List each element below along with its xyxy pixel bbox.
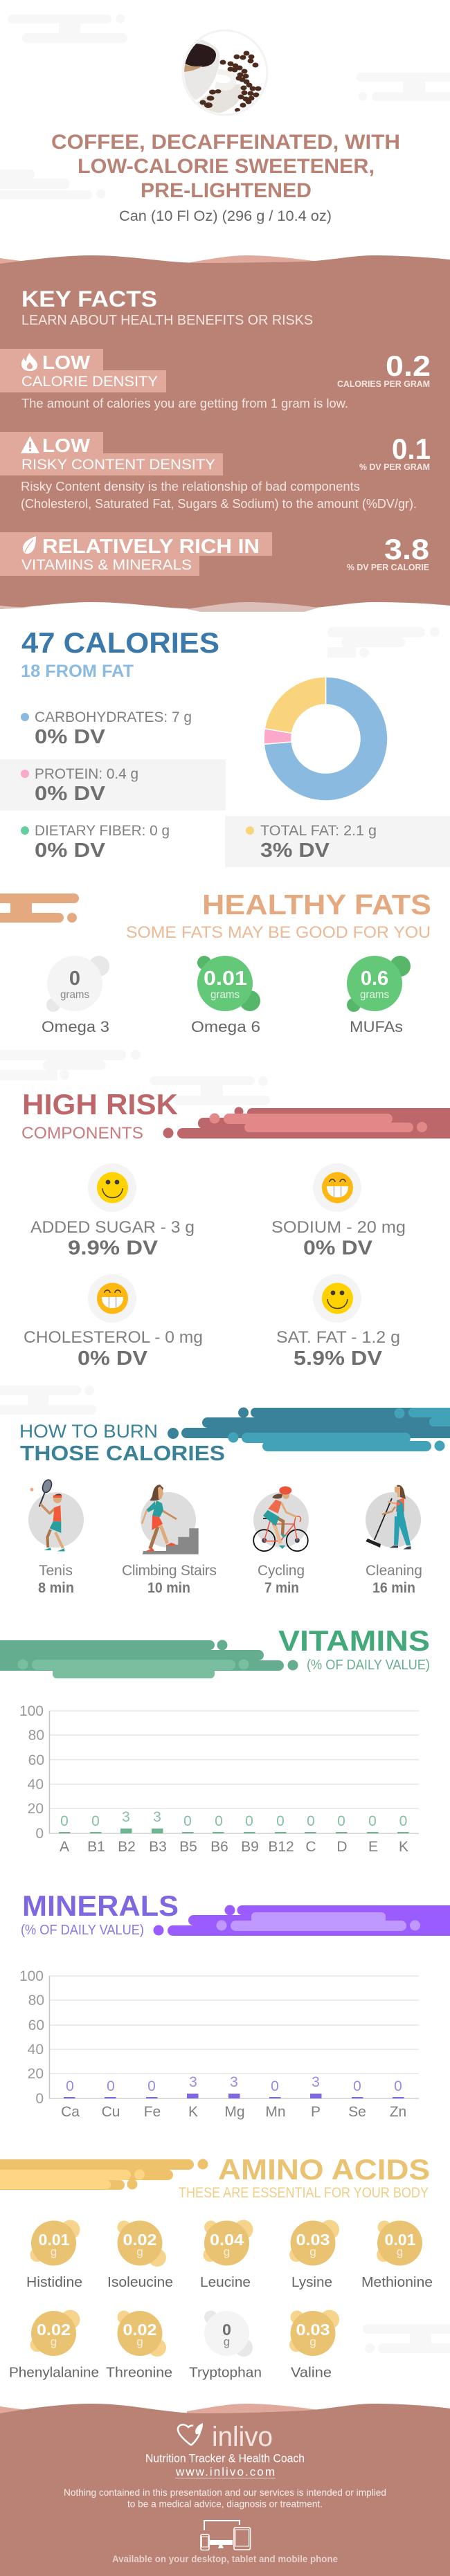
amino: tryptophan: 0 — [222, 2321, 231, 2339]
bar chart: vitamins: 80 — [28, 1727, 44, 1743]
decorative banner: minerals — [154, 1905, 450, 1936]
metric: mufas: 0.6 — [361, 968, 388, 990]
fact: vitamins and minerals: % DV PER CALORIE — [347, 562, 429, 572]
fact: vitamins and minerals — [0, 532, 429, 576]
activity: tennis: Tenis — [39, 1563, 73, 1579]
macro: carbohydrates: 0% DV — [35, 726, 106, 748]
amino: histidine: Histidine — [26, 2275, 82, 2290]
amino: lysine: Lysine — [291, 2275, 332, 2290]
amino: phenylalanine: g — [51, 2335, 57, 2348]
bar chart: minerals: Se — [348, 2104, 366, 2120]
bar chart: vitamins: 0 — [337, 1813, 345, 1829]
macro: carbohydrates — [21, 709, 192, 748]
fact: vitamins and minerals: RELATIVELY RICH IN — [42, 536, 260, 558]
amino: phenylalanine: Phenylalanine — [9, 2366, 99, 2381]
fact: calorie density: LOW — [42, 352, 91, 373]
macro: carbohydrates: CARBOHYDRATES: 7 g — [35, 709, 192, 725]
amino: histidine — [26, 2220, 82, 2290]
bar chart: minerals: 40 — [28, 2042, 44, 2058]
fact: risky content density: Risky Content density is the relationship of bad components — [21, 480, 360, 493]
amino: lysine — [289, 2220, 339, 2290]
bar chart: minerals: 0 — [147, 2078, 156, 2094]
bar chart: vitamins: 3 — [153, 1809, 161, 1825]
item: sodium: 0% DV — [303, 1237, 373, 1260]
icon: devices — [201, 2521, 251, 2550]
availability note: Available on your desktop, tablet and mobile phone — [112, 2553, 338, 2564]
bar chart: vitamins: K — [399, 1839, 408, 1855]
amino: threonine: g — [136, 2335, 143, 2348]
bar chart: minerals: 0 — [107, 2078, 115, 2094]
bar chart: vitamins: 0 — [183, 1813, 192, 1829]
heading: high risk: HIGH RISK — [22, 1088, 178, 1121]
macro: dietary fiber: DIETARY FIBER: 0 g — [35, 823, 170, 839]
fact: vitamins and minerals: VITAMINS & MINERALS — [21, 557, 192, 573]
metric: omega 6: Omega 6 — [191, 1018, 260, 1035]
bar chart: minerals: 0 — [353, 2078, 361, 2094]
heading: those calories: THOSE CALORIES — [20, 1441, 225, 1465]
amino: histidine: g — [51, 2245, 57, 2258]
subheading: components: COMPONENTS — [21, 1124, 143, 1143]
title: COFFEE, DECAFFEINATED, WITH — [51, 131, 400, 154]
bar chart: minerals: K — [188, 2104, 198, 2120]
item: sodium — [271, 1163, 406, 1260]
heading: amino acids: AMINO ACIDS — [218, 2153, 430, 2186]
activity: tennis: 8 min — [38, 1580, 74, 1596]
bar chart: minerals: 20 — [28, 2066, 44, 2082]
bar chart: minerals: 60 — [28, 2017, 44, 2033]
amino: isoleucine: g — [136, 2245, 143, 2258]
bar chart: minerals: 3 — [230, 2074, 238, 2090]
panel: healthy fats — [0, 889, 431, 1035]
bar chart: minerals: Cu — [102, 2104, 120, 2120]
macro: total fat: TOTAL FAT: 2.1 g — [260, 823, 377, 839]
bar chart: vitamins: 0 — [35, 1826, 44, 1842]
amino: tryptophan: Tryptophan — [189, 2366, 262, 2381]
amino: methionine: Methionine — [361, 2275, 433, 2290]
bar chart: vitamins: 0 — [91, 1813, 100, 1829]
heading: how to burn: HOW TO BURN — [19, 1421, 158, 1442]
panel: amino acids — [0, 2153, 433, 2381]
macro: protein: 0% DV — [35, 783, 106, 805]
bar chart: minerals: Ca — [61, 2104, 80, 2120]
panel: vitamins — [0, 1624, 430, 1855]
disclaimer — [64, 2487, 386, 2510]
bar chart: minerals: 80 — [28, 1993, 44, 2008]
amino: isoleucine — [107, 2220, 173, 2290]
activity: cleaning — [366, 1485, 422, 1596]
amino: methionine: g — [397, 2245, 403, 2258]
logo wordmark: inlivo — [212, 2422, 273, 2452]
amino: phenylalanine — [9, 2310, 99, 2381]
fact: calorie density: The amount of calories you are getting from 1 gram is low. — [21, 397, 348, 410]
fact: risky content density: % DV PER GRAM — [359, 462, 430, 472]
donut chart — [264, 677, 388, 801]
item: saturated fat: SAT. FAT - 1.2 g — [276, 1328, 400, 1347]
item: saturated fat — [276, 1274, 400, 1370]
activity: cycling: 7 min — [264, 1580, 299, 1596]
bar chart: minerals: 100 — [19, 1968, 44, 1984]
bar chart: vitamins: 20 — [28, 1801, 44, 1817]
food photo: coffee cup and beans — [181, 30, 267, 116]
panel: high risk — [21, 1088, 450, 1370]
bar chart: vitamins: 0 — [368, 1813, 377, 1829]
bar chart: vitamins: 0 — [60, 1813, 69, 1829]
panel: key facts — [0, 255, 450, 612]
metric: omega 3 — [42, 956, 109, 1035]
item: added sugar: ADDED SUGAR - 3 g — [30, 1218, 195, 1237]
amino: methionine: 0.01 — [385, 2231, 416, 2249]
item: cholesterol — [24, 1274, 203, 1370]
subheading: LEARN ABOUT HEALTH BENEFITS OR RISKS — [21, 313, 313, 328]
activity: cleaning: 16 min — [372, 1580, 415, 1596]
fact: risky content density: RISKY CONTENT DENSITY — [21, 457, 215, 473]
fact: risky content density: LOW — [42, 435, 91, 456]
bar chart: vitamins: E — [368, 1839, 378, 1855]
bar chart: vitamins: 60 — [28, 1752, 44, 1768]
macro: protein: PROTEIN: 0.4 g — [35, 766, 138, 782]
bar chart: minerals: 3 — [189, 2074, 197, 2090]
bar chart: minerals: Mg — [224, 2104, 245, 2120]
bar chart: vitamins: 0 — [276, 1813, 285, 1829]
item: added sugar — [30, 1163, 195, 1260]
decorative banner: healthy fats — [0, 894, 79, 923]
heading: healthy fats: HEALTHY FATS — [202, 889, 431, 920]
amino: lysine: g — [309, 2245, 316, 2258]
tagline: Nutrition Tracker & Health Coach — [145, 2451, 305, 2465]
subheading: from fat: 18 FROM FAT — [21, 662, 134, 681]
activity: tennis — [28, 1478, 84, 1596]
item: cholesterol: 0% DV — [78, 1348, 148, 1370]
disclaimer: to be a medical advice, diagnosis or treatment. — [127, 2498, 323, 2510]
amino: valine: g — [309, 2335, 316, 2348]
fact: calorie density: CALORIES PER GRAM — [337, 379, 430, 389]
item: added sugar: 9.9% DV — [68, 1237, 159, 1260]
disclaimer: Nothing contained in this presentation and our services is intended or implied — [64, 2487, 386, 2498]
amino: tryptophan — [189, 2310, 262, 2381]
subheading: healthy fats: SOME FATS MAY BE GOOD FOR YOU — [126, 923, 431, 942]
amino: lysine: 0.03 — [296, 2231, 330, 2249]
bar chart: vitamins: B3 — [149, 1839, 167, 1855]
amino: valine: 0.03 — [296, 2321, 330, 2339]
macro: dietary fiber — [21, 823, 170, 862]
bar chart: minerals: 0 — [66, 2078, 74, 2094]
activity: cycling — [253, 1487, 309, 1596]
metric: mufas: MUFAs — [350, 1018, 403, 1035]
amino: leucine: g — [224, 2245, 230, 2258]
item: saturated fat: 5.9% DV — [294, 1348, 383, 1370]
title: PRE-LIGHTENED — [141, 179, 312, 202]
bar chart: vitamins: 0 — [399, 1813, 407, 1829]
bar chart: vitamins: 40 — [28, 1777, 44, 1793]
amino: leucine: 0.04 — [210, 2231, 244, 2249]
amino: leucine — [200, 2220, 253, 2290]
fact: calorie density: CALORIE DENSITY — [21, 374, 158, 390]
website link: www.inlivo.com — [175, 2465, 275, 2478]
serving size: Can (10 Fl Oz) (296 g / 10.4 oz) — [119, 208, 332, 224]
metric: omega 3: 0 — [69, 968, 80, 990]
decorative banner: burn — [168, 1408, 450, 1451]
amino: leucine: Leucine — [200, 2275, 251, 2290]
panel: how to burn calories — [19, 1408, 450, 1596]
bar chart: vitamins: B5 — [179, 1839, 197, 1855]
bar chart: vitamins: 0 — [215, 1813, 223, 1829]
bar chart: vitamins — [19, 1703, 419, 1855]
activity: climbing stairs: Climbing Stairs — [122, 1563, 217, 1579]
fact: vitamins and minerals: 3.8 — [384, 533, 429, 565]
macro: dietary fiber: 0% DV — [35, 840, 106, 862]
bar chart: minerals: 3 — [312, 2074, 320, 2090]
amino: threonine — [106, 2310, 172, 2381]
macro: total fat — [225, 816, 450, 867]
bar chart: vitamins: D — [336, 1839, 348, 1855]
panel: footer — [0, 2404, 450, 2576]
bar chart: vitamins: A — [60, 1839, 69, 1855]
amino: valine: Valine — [291, 2366, 332, 2381]
bar chart: vitamins: C — [305, 1839, 316, 1855]
bar chart: vitamins: 100 — [19, 1703, 44, 1719]
amino: valine — [289, 2310, 339, 2381]
bar chart: vitamins: B6 — [210, 1839, 228, 1855]
metric: mufas: grams — [360, 989, 389, 1001]
title: LOW-CALORIE SWEETENER, — [78, 155, 375, 178]
fact: risky content density: 0.1 — [392, 433, 431, 465]
heading: calories: 47 CALORIES — [21, 626, 219, 659]
fact: risky content density — [0, 432, 431, 511]
metric: omega 3: Omega 3 — [42, 1018, 109, 1035]
metric: mufas — [347, 956, 411, 1035]
bar chart: vitamins: B2 — [118, 1839, 136, 1855]
activity: cycling: Cycling — [258, 1563, 305, 1579]
metric: omega 3: grams — [60, 989, 89, 1001]
activity: cleaning: Cleaning — [366, 1563, 422, 1579]
decorative banner: high risk — [163, 1107, 450, 1139]
item: cholesterol: CHOLESTEROL - 0 mg — [24, 1328, 203, 1347]
fact: risky content density: (Cholesterol, Saturated Fat, Sugars & Sodium) to the amount (%DV/gr). — [21, 497, 417, 511]
macro: total fat: 3% DV — [260, 840, 330, 862]
amino: methionine — [361, 2220, 433, 2290]
bar chart: minerals: 0 — [35, 2091, 44, 2107]
activity: climbing stairs: 10 min — [147, 1580, 190, 1596]
bar chart: minerals: 0 — [394, 2078, 402, 2094]
bar chart: vitamins: 0 — [307, 1813, 315, 1829]
bar chart: minerals: Fe — [144, 2104, 161, 2120]
amino: isoleucine: Isoleucine — [107, 2275, 173, 2290]
decorative banner: amino acids — [0, 2159, 208, 2190]
heading: vitamins: VITAMINS — [278, 1624, 430, 1657]
decorative banner: vitamins — [0, 1640, 298, 1678]
fact: calorie density — [0, 349, 431, 410]
bar chart: vitamins: 0 — [245, 1813, 253, 1829]
panel: minerals — [19, 1889, 450, 2120]
metric: omega 6 — [191, 956, 260, 1035]
amino: phenylalanine: 0.02 — [37, 2321, 71, 2339]
fact: calorie density: 0.2 — [386, 350, 431, 382]
panel: calories — [0, 626, 450, 867]
metric: omega 6: grams — [210, 989, 240, 1001]
metric: omega 6: 0.01 — [204, 968, 247, 990]
bar chart: minerals: 0 — [271, 2078, 279, 2094]
macro: protein — [0, 759, 226, 810]
heading: key facts: KEY FACTS — [21, 287, 157, 311]
bar chart: vitamins: B1 — [87, 1839, 105, 1855]
subheading: vitamins: (% OF DAILY VALUE) — [307, 1658, 430, 1673]
heading: minerals: MINERALS — [22, 1889, 179, 1922]
amino: threonine: 0.02 — [123, 2321, 156, 2339]
amino: histidine: 0.01 — [39, 2231, 70, 2249]
amino: isoleucine: 0.02 — [123, 2231, 156, 2249]
amino: tryptophan: g — [224, 2335, 230, 2348]
amino: threonine: Threonine — [106, 2366, 172, 2381]
bar chart: minerals — [19, 1968, 419, 2120]
title — [51, 131, 400, 202]
bar chart: vitamins: B9 — [241, 1839, 259, 1855]
subheading: minerals: (% OF DAILY VALUE) — [21, 1923, 144, 1938]
bar chart: minerals: P — [311, 2104, 321, 2120]
bar chart: minerals: Mn — [265, 2104, 286, 2120]
item: sodium: SODIUM - 20 mg — [271, 1218, 406, 1237]
bar chart: minerals: Zn — [390, 2104, 406, 2120]
logo: inlivo heart — [178, 2423, 203, 2445]
activity: climbing stairs — [122, 1485, 217, 1596]
bar chart: vitamins: 3 — [122, 1809, 130, 1825]
bar chart: vitamins: B12 — [268, 1839, 294, 1855]
